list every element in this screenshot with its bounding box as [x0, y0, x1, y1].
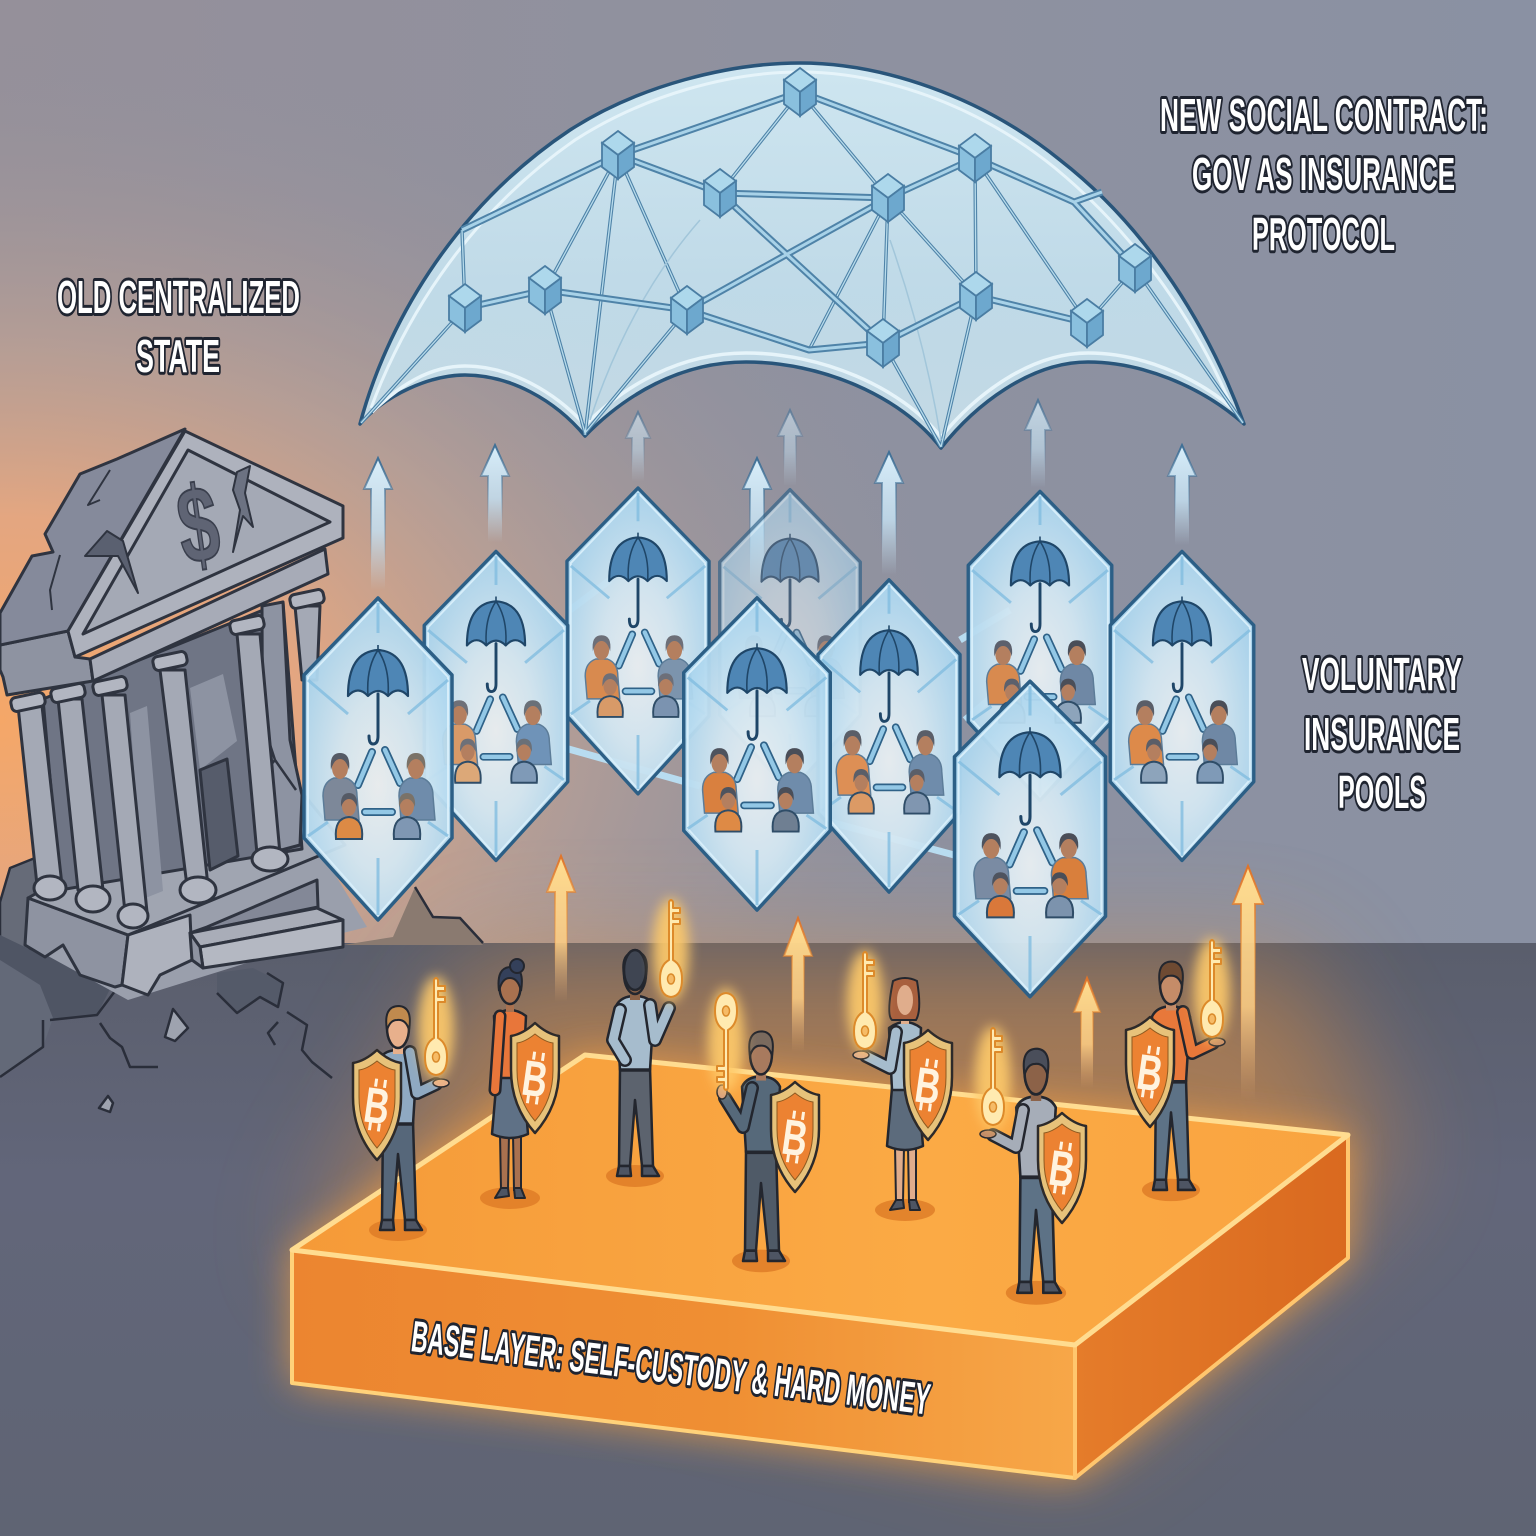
person 7 with shield and key	[1126, 938, 1230, 1201]
network links: thin	[361, 92, 1243, 447]
insurance pool	[968, 491, 1112, 801]
person 4 with shield and key: B	[779, 1109, 811, 1167]
platform front face	[292, 1250, 1075, 1478]
roof side	[0, 429, 185, 645]
person 1 with shield and key	[353, 976, 454, 1241]
platform right face	[1075, 1135, 1348, 1478]
person 2 with shield: B	[519, 1050, 551, 1108]
title: new social contract: PROTOCOL	[1252, 208, 1395, 260]
insurance pool, faded rear	[720, 490, 860, 792]
person 6 with shield and key	[975, 1026, 1086, 1305]
insurance pool	[684, 598, 830, 910]
title: new social contract	[1160, 89, 1488, 260]
person 5 with shield and key	[847, 950, 952, 1221]
insurance pool	[818, 580, 960, 892]
rear wall	[43, 602, 302, 890]
insurance pool	[424, 551, 568, 861]
insurance pool	[567, 488, 709, 794]
temple cracks	[85, 531, 138, 593]
person 5 with shield and key: B	[912, 1057, 944, 1115]
background wall	[0, 0, 1536, 948]
person 6 with shield and key: B	[1046, 1140, 1078, 1198]
floor	[0, 943, 1536, 1536]
insurance pool	[1110, 551, 1254, 861]
network links: thick	[462, 92, 1135, 350]
person 7 with shield and key: B	[1134, 1044, 1166, 1102]
broken slab	[190, 880, 318, 933]
arrows: blue, pools to dome	[364, 400, 1196, 590]
warm glow around the base layer	[310, 960, 1400, 1450]
person 1 with shield and key: B	[361, 1077, 393, 1135]
columns	[18, 606, 320, 912]
pediment	[68, 431, 343, 657]
inner wall panels	[130, 706, 163, 899]
insurance pool	[304, 598, 452, 920]
connector bars between pools	[565, 580, 1010, 856]
person 3 back view with key	[606, 898, 689, 1187]
right wall	[262, 602, 302, 855]
title: old centralized state	[57, 271, 300, 382]
door	[200, 759, 238, 870]
dollar sign: $	[170, 462, 226, 587]
title: old centralized state: OLD CENTRALIZED	[57, 271, 300, 323]
platform: base layer	[292, 1055, 1348, 1478]
crumbling temple: old centralized state	[0, 429, 367, 1000]
arrows: orange, people to pools	[547, 856, 1263, 1100]
rubble and cracked ground	[0, 858, 483, 1112]
insurance pool, front	[955, 681, 1105, 997]
person 4 with shield and key	[708, 988, 819, 1272]
title: old centralized state: STATE	[136, 330, 220, 382]
person 2 with shield	[480, 959, 559, 1209]
dome: decentralized insurance protocol network	[360, 63, 1244, 448]
title: voluntary insurance pools	[1302, 648, 1462, 818]
title: voluntary insurance pools: POOLS	[1338, 766, 1426, 818]
entablature	[0, 631, 93, 695]
platform top face	[292, 1055, 1348, 1345]
base layer label: BASE LAYER: SELF-CUSTODY & HARD MONEY	[409, 1312, 933, 1425]
temple base	[28, 850, 367, 1000]
network nodes	[449, 68, 1151, 367]
capitals and column bases	[10, 589, 325, 928]
